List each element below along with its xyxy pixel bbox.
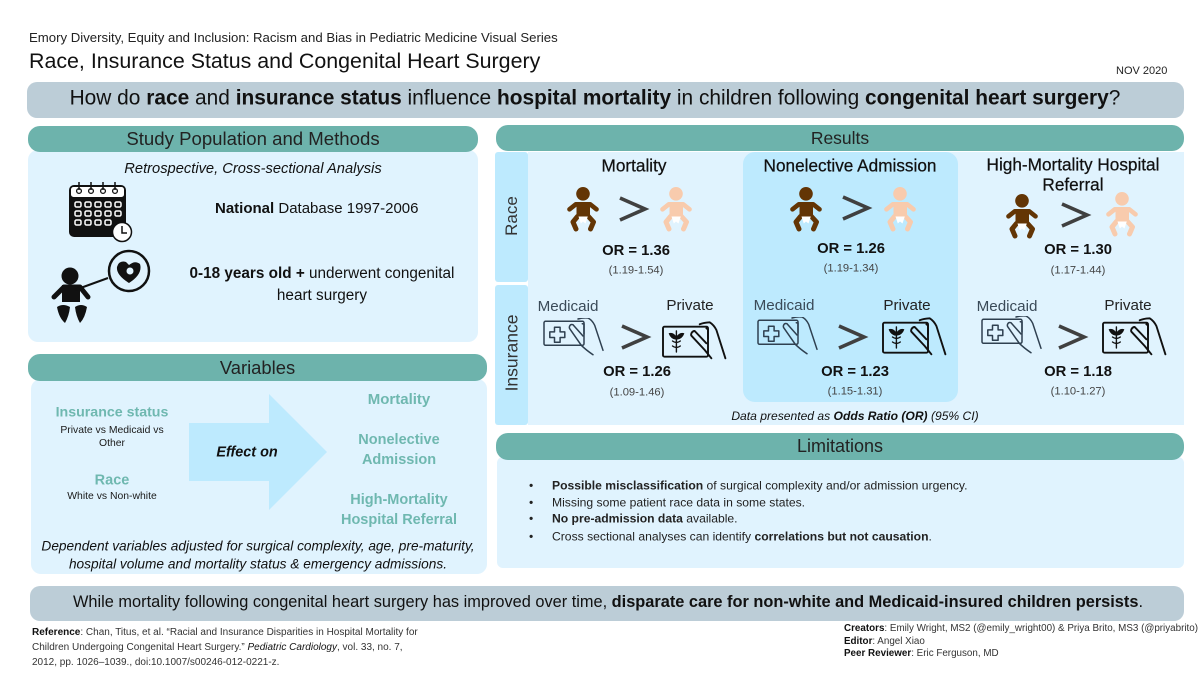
odds ratio: OR = 1.26 bbox=[817, 241, 885, 257]
arrow: effect on bbox=[189, 394, 327, 510]
panel: results bbox=[495, 125, 1184, 425]
highlighted nonelective column bbox=[743, 152, 958, 402]
heading: variables: Variables bbox=[220, 356, 295, 378]
panel: study population and methods bbox=[28, 126, 478, 342]
confidence interval: (1.09-1.46) bbox=[610, 386, 664, 398]
independent variable: insurance: Other bbox=[99, 438, 125, 449]
confidence interval: (1.15-1.31) bbox=[828, 385, 882, 397]
insurance comparison: Medicaid bbox=[754, 297, 814, 314]
race row label: Race bbox=[502, 196, 521, 236]
results background bbox=[528, 152, 1184, 425]
outcome: high-mortality hospital referral: High-Mortality bbox=[350, 492, 448, 508]
insurance comparison: Private bbox=[1104, 297, 1152, 314]
outcome: nonelective admission: Nonelective bbox=[358, 432, 440, 448]
conclusion text: While mortality following congenital heart surgery has improved over time, disparate care for non-white and Medicaid-insured children persists. bbox=[73, 593, 1143, 611]
data note: Data presented as Odds Ratio (OR) (95% CI) bbox=[731, 409, 979, 423]
column title: High-Mortality Hospital bbox=[987, 154, 1159, 174]
outcome: nonelective admission bbox=[358, 432, 440, 468]
limitations list: Missing some patient race data in some states. bbox=[552, 496, 805, 510]
icon: baby with heart magnifier bbox=[52, 250, 150, 323]
heading: limitations bbox=[496, 433, 1184, 460]
race comparison icons bbox=[1006, 192, 1138, 238]
main title: Race, Insurance Status and Congenital Heart Surgery bbox=[29, 49, 540, 73]
independent variable: insurance bbox=[56, 404, 168, 449]
outcome: high-mortality hospital referral: Hospital Referral bbox=[341, 512, 457, 528]
outcome: mortality: Mortality bbox=[368, 391, 430, 408]
independent variable: insurance: Insurance status bbox=[56, 404, 168, 420]
column title: Mortality bbox=[602, 156, 666, 176]
limitations list bbox=[529, 479, 967, 544]
limitations list: • bbox=[529, 496, 533, 510]
outcome: nonelective admission: Admission bbox=[362, 452, 436, 468]
limitations list: Possible misclassification of surgical complexity and/or admission urgency. bbox=[552, 479, 967, 493]
panel: variables bbox=[28, 354, 487, 574]
reference bbox=[32, 627, 418, 668]
race comparison icons bbox=[567, 187, 692, 232]
text: eligibility: 0-18 years old + underwent congenital bbox=[190, 265, 454, 282]
confidence interval: (1.19-1.54) bbox=[609, 264, 663, 276]
insurance comparison: Medicaid bbox=[977, 298, 1037, 315]
panel: limitations bbox=[496, 433, 1184, 568]
independent variable: race: White vs Non-white bbox=[67, 491, 157, 502]
credits: Creators: Emily Wright, MS2 (@emily_wright00) & Priya Brito, MS3 (@priyabrito) bbox=[844, 623, 1198, 634]
text: eligibility bbox=[190, 265, 454, 304]
column title: Referral bbox=[1042, 174, 1104, 194]
insurance row label bbox=[495, 285, 528, 425]
reference: 2012, pp. 1026–1039., doi:10.1007/s00246-012-0221-z. bbox=[32, 657, 279, 668]
icon: calendar bbox=[69, 182, 132, 242]
column: mortality bbox=[538, 156, 726, 398]
insurance comparison bbox=[754, 297, 946, 356]
date: NOV 2020 bbox=[1116, 65, 1167, 77]
reference: Children Undergoing Congenital Heart Surgery.” Pediatric Cardiology, vol. 33, no. 7, bbox=[32, 642, 403, 653]
confidence interval: (1.17-1.44) bbox=[1051, 264, 1105, 276]
odds ratio: OR = 1.30 bbox=[1044, 242, 1112, 258]
independent variable: race bbox=[67, 472, 157, 502]
confidence interval: (1.10-1.27) bbox=[1051, 385, 1105, 397]
adjustment note: Dependent variables adjusted for surgical complexity, age, pre-maturity, bbox=[41, 538, 475, 554]
question text: How do race and insurance status influence hospital mortality in children following congenital heart surgery? bbox=[70, 86, 1120, 109]
heading: study population bbox=[28, 126, 478, 152]
text: eligibility: heart surgery bbox=[277, 287, 367, 304]
credits: Editor: Angel Xiao bbox=[844, 636, 925, 646]
study design text: Retrospective, Cross-sectional Analysis bbox=[124, 161, 382, 177]
limitations list: • bbox=[529, 512, 533, 526]
column: nonelective admission bbox=[754, 156, 946, 397]
insurance row label: Insurance bbox=[502, 315, 522, 391]
odds ratio: OR = 1.26 bbox=[603, 364, 671, 380]
insurance comparison: Private bbox=[883, 297, 931, 314]
insurance comparison: Private bbox=[666, 297, 714, 314]
limitations list: Cross sectional analyses can identify correlations but not causation. bbox=[552, 530, 932, 544]
credits bbox=[844, 623, 1198, 659]
column title bbox=[987, 154, 1159, 194]
heading: limitations: Limitations bbox=[797, 436, 883, 456]
heading: results: Results bbox=[811, 128, 869, 148]
reference: Reference: Chan, Titus, et al. “Racial and Insurance Disparities in Hospital Mortality for bbox=[32, 627, 418, 638]
independent variable: race: Race bbox=[95, 472, 129, 488]
odds ratio: OR = 1.18 bbox=[1044, 364, 1112, 380]
odds ratio: OR = 1.23 bbox=[821, 364, 889, 380]
question banner bbox=[27, 82, 1184, 118]
credits: Peer Reviewer: Eric Ferguson, MD bbox=[844, 648, 999, 659]
column: high-mortality hospital referral bbox=[977, 154, 1166, 397]
race row label bbox=[495, 152, 528, 282]
odds ratio: OR = 1.36 bbox=[602, 243, 670, 259]
conclusion banner bbox=[30, 586, 1184, 621]
race comparison icons bbox=[790, 187, 916, 232]
limitations list: • bbox=[529, 530, 533, 544]
heading: study population: Study Population and Methods bbox=[126, 128, 380, 149]
text: national database: National Database 1997-2006 bbox=[215, 200, 418, 217]
insurance comparison bbox=[977, 297, 1166, 356]
outcome: high-mortality hospital referral bbox=[341, 492, 457, 528]
arrow label: Effect on bbox=[216, 444, 278, 460]
adjustment note bbox=[41, 538, 475, 572]
series title: Emory Diversity, Equity and Inclusion: Racism and Bias in Pediatric Medicine Visual Series bbox=[29, 30, 558, 45]
insurance comparison: Medicaid bbox=[538, 298, 598, 315]
column title: Nonelective Admission bbox=[764, 156, 936, 176]
independent variable: insurance: Private vs Medicaid vs bbox=[60, 425, 164, 436]
limitations list: No pre-admission data available. bbox=[552, 512, 738, 526]
adjustment note: hospital volume and mortality status & emergency admissions. bbox=[69, 556, 447, 571]
confidence interval: (1.19-1.34) bbox=[824, 262, 878, 274]
insurance comparison bbox=[538, 297, 726, 360]
limitations list: • bbox=[529, 479, 533, 493]
heading: results bbox=[496, 125, 1184, 151]
heading: variables bbox=[28, 354, 487, 381]
